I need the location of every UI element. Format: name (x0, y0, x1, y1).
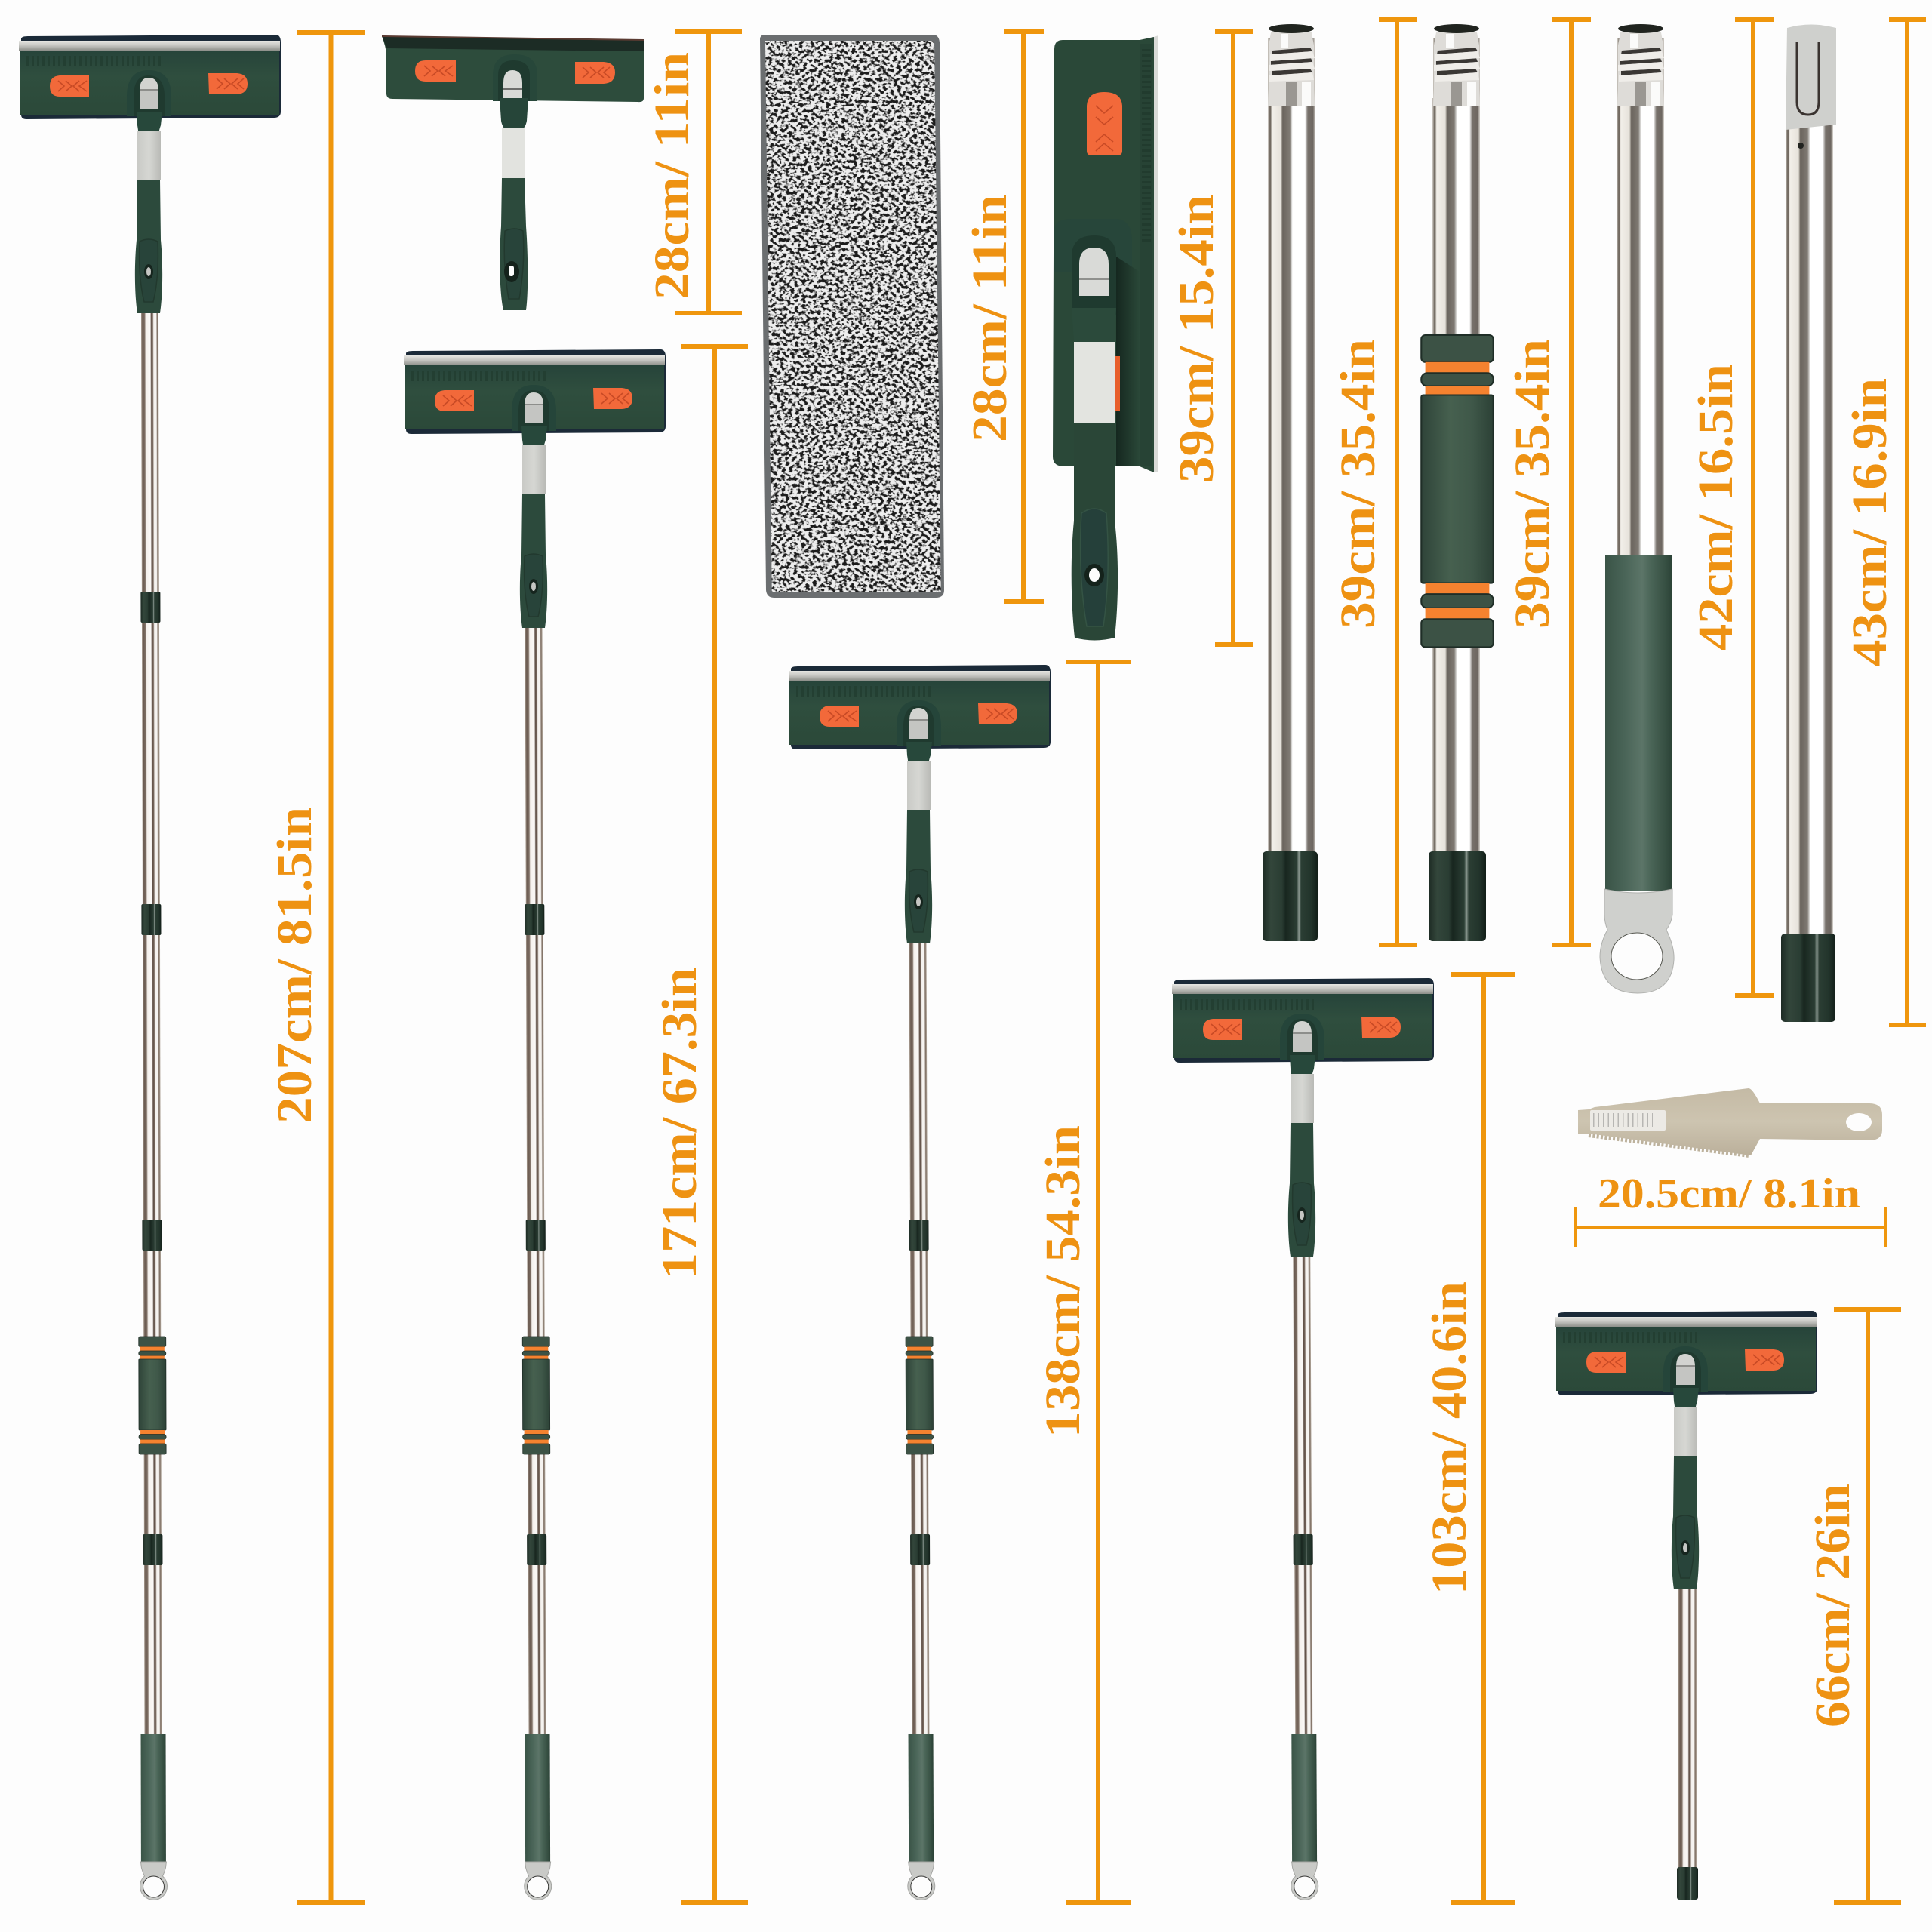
squeegee at 138 cm (789, 665, 1051, 1900)
dimension line 39 cm side head (1215, 32, 1253, 645)
dimension line 171 cm (681, 346, 748, 1903)
squeegee at 66 cm (1555, 1311, 1817, 1900)
label 138 cm: 138cm/ 54.3in (1035, 1125, 1091, 1438)
dimension line 39 cm foam tube (1552, 20, 1591, 945)
squeegee at 103 cm (1172, 978, 1434, 1900)
dimension line 39 cm tube (1379, 20, 1417, 945)
label 42 cm: 42cm/ 16.5in (1688, 364, 1743, 651)
label 28 cm head: 28cm/ 11in (645, 52, 700, 300)
beige scraper tool (1578, 1088, 1882, 1155)
label 171 cm: 171cm/ 67.3in (652, 968, 707, 1279)
dimension line 28 cm pad (1004, 32, 1044, 601)
label 39 cm tube: 39cm/ 35.4in (1331, 339, 1386, 629)
label 28 cm pad: 28cm/ 11in (962, 195, 1017, 442)
microfiber mop pad (760, 35, 944, 598)
label 39 cm foam tube: 39cm/ 35.4in (1505, 339, 1560, 629)
dimension line 138 cm (1066, 662, 1131, 1903)
tube with grey slotted sleeve and black cap (1781, 24, 1836, 1022)
telescopic tube with long grip and hanging ring (1600, 24, 1674, 993)
vertical side-view head and handle (1053, 35, 1158, 640)
dimension line 43 cm (1889, 20, 1926, 1025)
label 39 cm side head: 39cm/ 15.4in (1169, 195, 1224, 483)
label 20.5 cm: 20.5cm/ 8.1in (1598, 1171, 1860, 1217)
label 43 cm: 43cm/ 16.9in (1842, 378, 1897, 666)
telescopic tube with foam grip (1421, 24, 1494, 941)
dimension line 103 cm (1451, 974, 1515, 1903)
dimension line 28 cm head (675, 32, 742, 313)
dimension line 42 cm (1735, 20, 1774, 995)
squeegee head only, 28 cm (382, 36, 644, 310)
label 66 cm: 66cm/ 26in (1805, 1484, 1860, 1727)
dimension line 20.5 cm (1575, 1208, 1885, 1247)
dimension line 66 cm (1834, 1309, 1901, 1903)
telescopic tube with threaded end and black cap (1263, 24, 1318, 941)
label 103 cm: 103cm/ 40.6in (1422, 1281, 1477, 1595)
label 207 cm: 207cm/ 81.5in (267, 807, 322, 1124)
squeegee at 207 cm: head, all poles (19, 35, 281, 1900)
squeegee at 171 cm (404, 349, 666, 1900)
dimension line 207 cm (297, 32, 365, 1903)
